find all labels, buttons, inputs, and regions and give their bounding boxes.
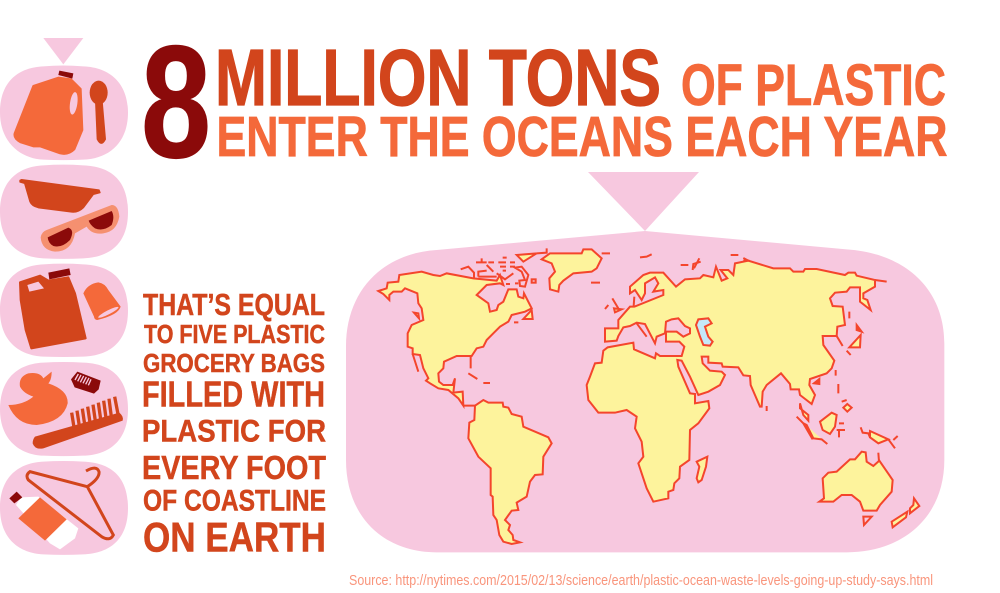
greenland (542, 249, 602, 292)
madagascar (697, 457, 707, 482)
greenland edge strokes (591, 253, 610, 283)
british isles (614, 308, 622, 312)
eurasia and africa (587, 261, 875, 502)
headline numeral: 8 (141, 12, 211, 191)
line eight: ON EARTH (143, 514, 326, 560)
line three: GROCERY BAGS (143, 348, 325, 378)
headline: million tons: MILLION TONS (215, 33, 661, 122)
line four: FILLED WITH (142, 374, 325, 414)
line one: THAT’S EQUAL (143, 288, 325, 322)
asian islands (767, 312, 898, 462)
central america link and north america islands (413, 322, 518, 406)
caspian sea (696, 318, 713, 346)
arctic islands (414, 248, 547, 319)
line two: TO FIVE PLASTIC (144, 319, 325, 349)
south america (468, 400, 552, 544)
map background (346, 231, 944, 552)
icon panel: duck, bottle cap and comb (0, 362, 128, 456)
icon panel: bowl and sunglasses (0, 165, 128, 259)
line seven: OF COASTLINE (143, 484, 326, 518)
north america (378, 272, 532, 406)
world map (346, 231, 944, 552)
line six: EVERY FOOT (142, 450, 326, 487)
panel: plastic item icons column (0, 38, 128, 555)
text block: equivalence statement (142, 288, 326, 560)
line five: PLASTIC FOR (142, 412, 326, 448)
small pointer triangle (43, 38, 83, 64)
pointer triangle to map (588, 172, 699, 231)
australia (819, 452, 893, 511)
new zealand (892, 498, 919, 527)
icon panel: jug and spoon (0, 65, 128, 160)
icon panel: jerrycan and cup (0, 264, 128, 357)
icon panel: hanger and bottle (0, 461, 128, 555)
european and siberian coast strokes (605, 254, 887, 337)
tasmania (863, 517, 872, 525)
